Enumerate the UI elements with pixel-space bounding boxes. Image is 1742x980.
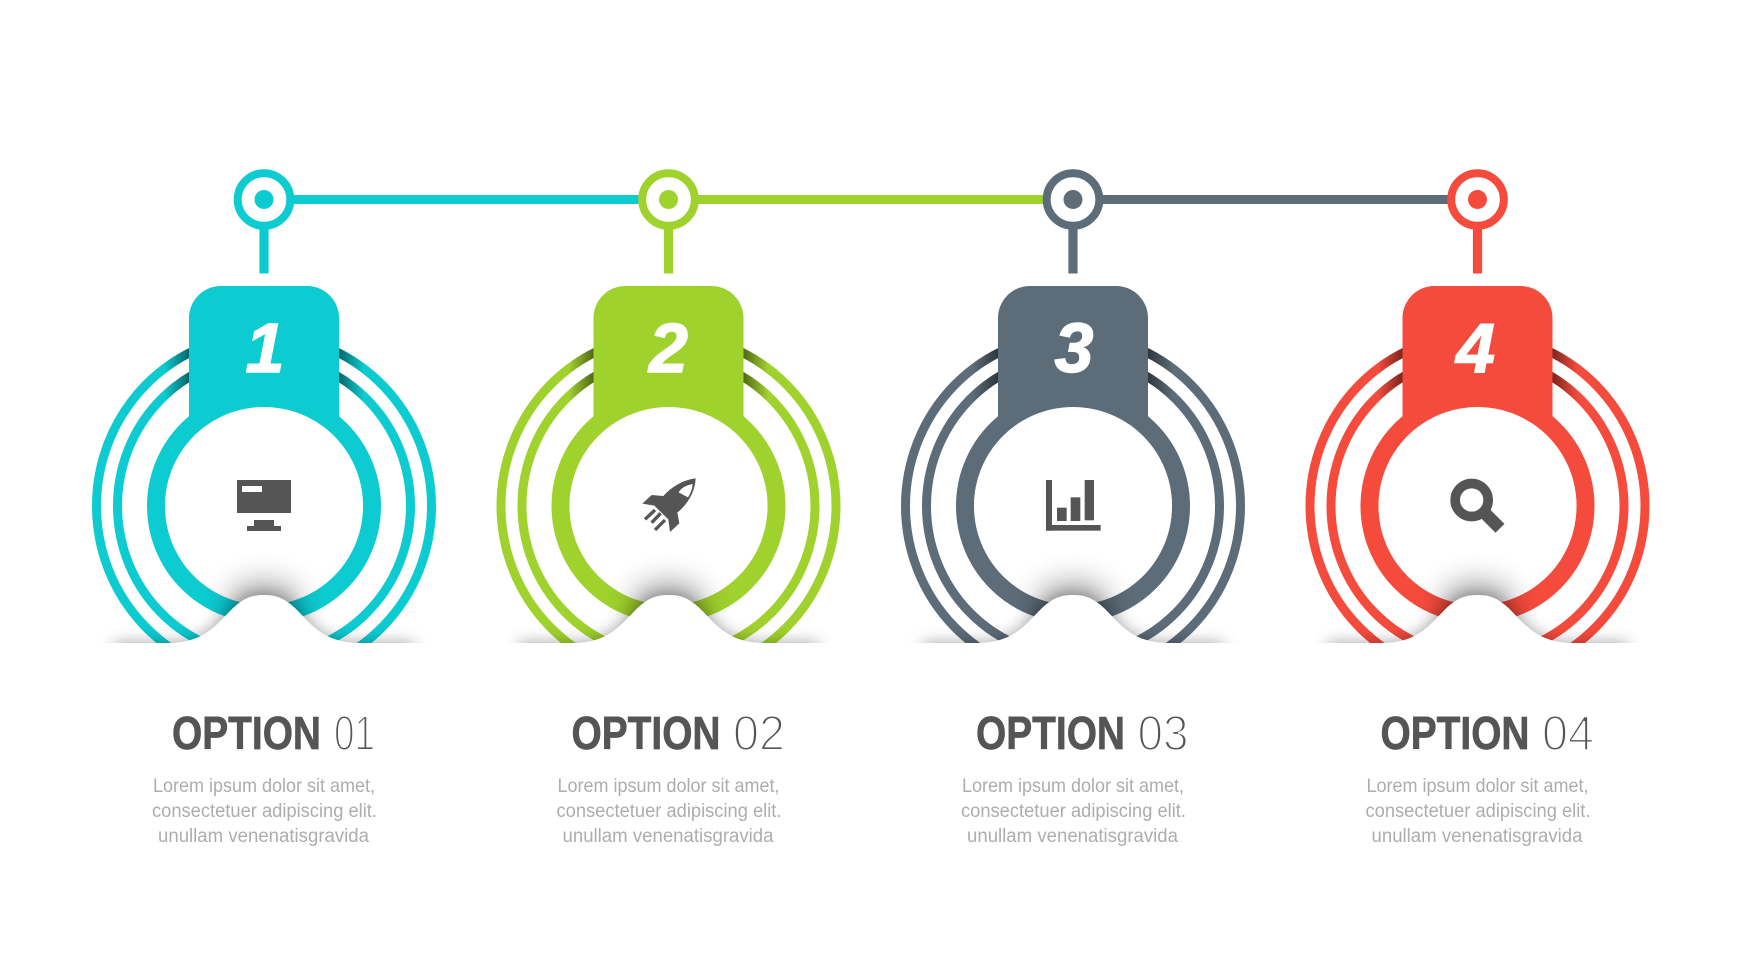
description 1: consectetuer adipiscing elit. — [152, 801, 377, 822]
white wave fold 2 — [478, 595, 858, 670]
number 3: 3 — [1055, 309, 1094, 387]
inner white circle 3 — [974, 407, 1172, 605]
connector line 3 — [1073, 195, 1478, 204]
description 4: consectetuer adipiscing elit. — [1366, 801, 1590, 822]
heading: option 01: 01 — [334, 707, 375, 761]
heading: option 02: 02 — [733, 707, 785, 761]
description 3: Lorem ipsum dolor sit amet, — [962, 776, 1184, 797]
concentric rings 2 — [496, 348, 840, 643]
panel: option 1 — [74, 173, 454, 847]
fold shadow 2 — [518, 580, 818, 665]
description 1: unullam venenatisgravida — [158, 826, 369, 847]
description 1: Lorem ipsum dolor sit amet, — [153, 776, 375, 797]
number tab 1 — [189, 286, 339, 425]
heading: option 04: 04 — [1542, 707, 1594, 761]
description 2 — [556, 776, 782, 847]
description 4: Lorem ipsum dolor sit amet, — [1366, 776, 1588, 797]
panel: option 4 — [1288, 173, 1668, 847]
description 3 — [961, 776, 1186, 847]
description 2: consectetuer adipiscing elit. — [556, 801, 782, 822]
heading: option 03: 03 — [1138, 707, 1188, 761]
description 4: unullam venenatisgravida — [1372, 826, 1583, 847]
fold shadow 3 — [923, 580, 1223, 665]
timeline node 2 — [642, 173, 695, 274]
icon: bar chart — [1046, 480, 1101, 531]
icon: monitor — [237, 480, 291, 531]
timeline node 1 — [238, 173, 290, 274]
number tab 3 — [998, 286, 1148, 425]
description 2: Lorem ipsum dolor sit amet, — [558, 776, 780, 797]
number 2: 2 — [647, 309, 688, 387]
inner white circle 4 — [1378, 407, 1576, 605]
infographic — [92, 169, 1650, 846]
number 1: 1 — [246, 309, 284, 387]
timeline node 3 — [1047, 173, 1099, 274]
white wave fold 3 — [883, 595, 1263, 670]
heading: option 02: OPTION — [572, 707, 720, 759]
icon: rocket — [642, 478, 696, 532]
connector line 2 — [668, 195, 1073, 204]
heading: option 04: OPTION — [1380, 707, 1530, 759]
inner white circle 2 — [570, 407, 768, 605]
number tab 2 — [594, 286, 744, 425]
connector line 1 — [264, 195, 669, 204]
icon: magnifier — [1455, 483, 1500, 528]
description 1 — [152, 776, 377, 847]
number 4: 4 — [1454, 309, 1495, 387]
concentric rings 4 — [1306, 348, 1650, 643]
description 2: unullam venenatisgravida — [562, 826, 774, 847]
fold shadow 1 — [114, 580, 414, 665]
timeline node 4 — [1451, 173, 1504, 274]
panel: option 3 — [883, 173, 1263, 847]
inner white circle 1 — [165, 407, 363, 605]
number tab 4 — [1402, 286, 1552, 425]
heading: option 01: OPTION — [172, 707, 321, 759]
panel: option 2 — [478, 173, 858, 847]
white wave fold 1 — [74, 595, 454, 670]
fold shadow 4 — [1328, 580, 1628, 665]
concentric rings 3 — [901, 348, 1245, 643]
concentric rings 1 — [92, 348, 436, 643]
description 3: unullam venenatisgravida — [967, 826, 1178, 847]
white wave fold 4 — [1288, 595, 1668, 670]
description 4 — [1366, 776, 1590, 847]
heading: option 03: OPTION — [976, 707, 1125, 759]
description 3: consectetuer adipiscing elit. — [961, 801, 1186, 822]
